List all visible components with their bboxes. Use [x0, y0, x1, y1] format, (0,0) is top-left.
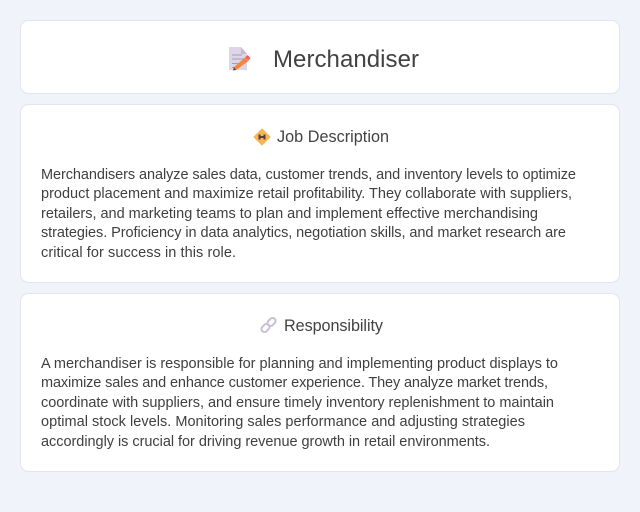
- heading: Merchandiser: Merchandiser: [273, 46, 419, 73]
- icon: diamond road sign: [254, 129, 270, 145]
- text block: job description body: critical for success in this role.: [41, 245, 236, 261]
- text block: responsibility body: accordingly is crucial for driving revenue growth in retail environments.: [41, 434, 490, 450]
- panel: job description: [20, 104, 620, 282]
- heading: Responsibility: Responsibility: [284, 317, 384, 335]
- text block: job description body: strategies. Proficiency in data analytics, negotiation skills, and market research are: [41, 225, 566, 241]
- heading: Job Description: Job Description: [277, 128, 389, 146]
- text block: responsibility body: optimal stock levels. Monitoring sales performance and adjusting strategies: [41, 414, 525, 430]
- icon: document with pencil: [229, 47, 250, 70]
- text block: job description body: product placement and maximize retail profitability. They collaborate with suppliers,: [41, 186, 572, 202]
- icon: chain link: [260, 317, 277, 333]
- text block: job description body: [41, 167, 576, 261]
- panel: responsibility: [20, 294, 620, 472]
- panel: title: [20, 20, 620, 94]
- text block: responsibility body: A merchandiser is responsible for planning and implementing product displays to: [41, 356, 558, 372]
- text block: job description body: retailers, and marketing teams to plan and implement effective merchandising: [41, 206, 538, 222]
- text block: responsibility body: maximize sales and enhance customer experience. They analyze market trends,: [41, 375, 548, 391]
- text block: responsibility body: [41, 356, 558, 450]
- text block: responsibility body: coordinate with suppliers, and ensure timely inventory replenishment to maintain: [41, 395, 554, 411]
- text block: job description body: Merchandisers analyze sales data, customer trends, and inventory levels to optimize: [41, 167, 576, 183]
